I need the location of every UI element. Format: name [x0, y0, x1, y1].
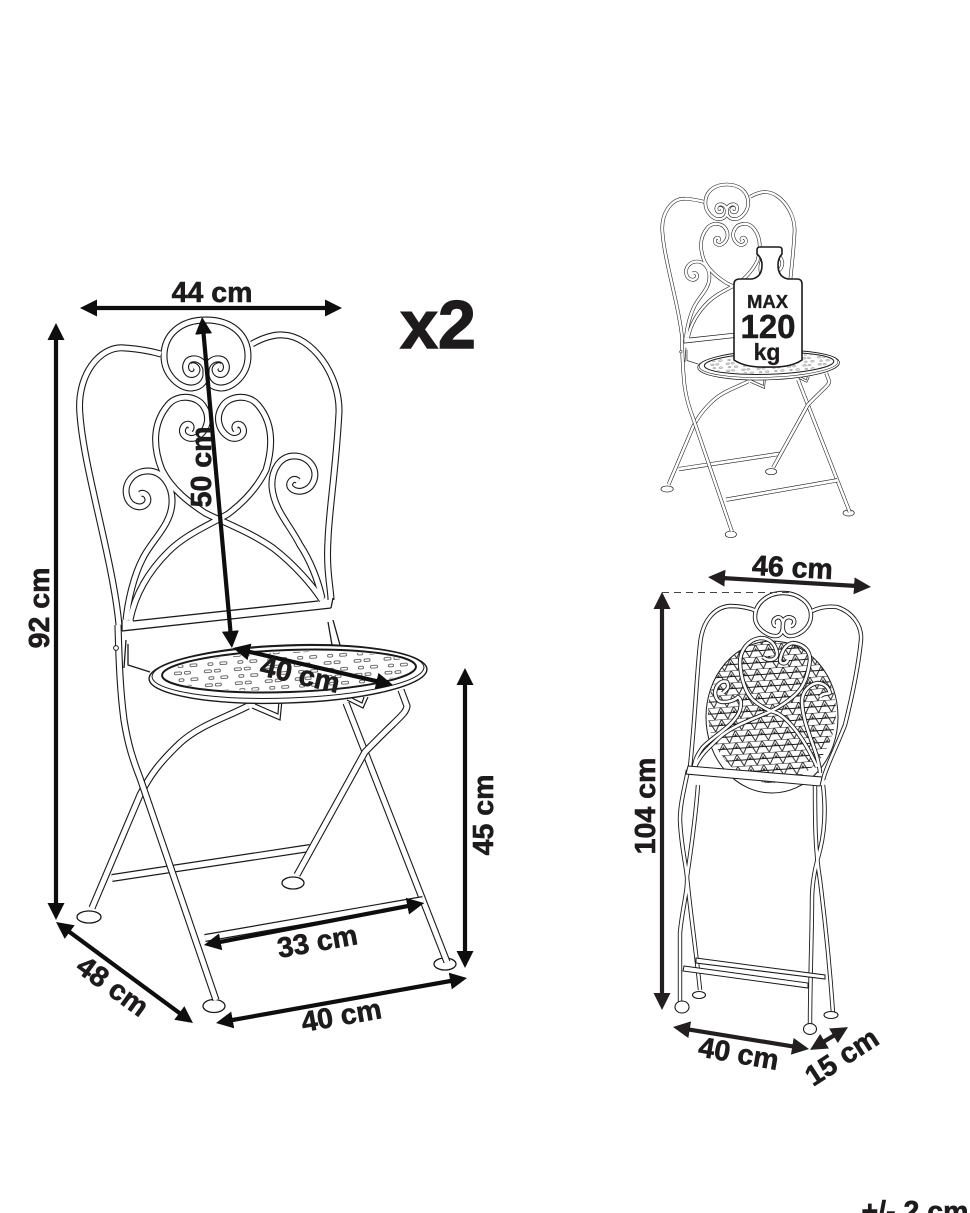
- label: 40 cm floor: 40 cm: [299, 993, 384, 1039]
- arrow: 46 cm folded width: [722, 550, 857, 586]
- small chair with load weight: [661, 184, 854, 538]
- folded chair illustration: [675, 593, 861, 1034]
- multiplier x2: x2: [400, 287, 476, 363]
- label: 33 cm: 33 cm: [275, 919, 360, 965]
- arrow: 40 cm width at floor: [230, 980, 453, 1039]
- label: 44 cm: 44 cm: [172, 277, 252, 309]
- label: 46 cm: 46 cm: [751, 550, 834, 586]
- arrow: 48 cm depth: [67, 930, 182, 1023]
- folded chair tubes: [680, 593, 861, 1027]
- label: 40 cm folded: 40 cm: [696, 1031, 781, 1077]
- main chair illustration: [77, 320, 456, 1012]
- folded chair feet: [675, 992, 838, 1034]
- small chair illustration: [661, 184, 854, 538]
- dashed height guide: [662, 592, 790, 594]
- weight text: 120: 120: [740, 308, 796, 345]
- arrow: 15 cm folded depth: [799, 1022, 885, 1093]
- label: 50 cm: 50 cm: [186, 427, 218, 507]
- arrow: 33 cm leg span: [218, 906, 410, 965]
- folded seat disc with mesh: [706, 641, 838, 793]
- icon: weight: [734, 247, 802, 367]
- arrow: 40 cm folded width: [687, 1029, 795, 1077]
- label: 15 cm: 15 cm: [799, 1022, 885, 1093]
- label: 48 cm: 48 cm: [70, 950, 154, 1023]
- label: 40 cm seat: 40 cm: [257, 651, 343, 700]
- arrow: 40 cm seat diameter: [247, 651, 379, 700]
- arrow: 50 cm backrest height: [186, 331, 231, 634]
- folded chair crossbars and rails: [683, 766, 825, 988]
- label: 104 cm: 104 cm: [630, 758, 662, 854]
- label: 92 cm: 92 cm: [24, 568, 56, 648]
- weight text: kg: kg: [754, 339, 780, 365]
- weight text: MAX: MAX: [747, 291, 789, 312]
- label: 45 cm: 45 cm: [468, 775, 500, 855]
